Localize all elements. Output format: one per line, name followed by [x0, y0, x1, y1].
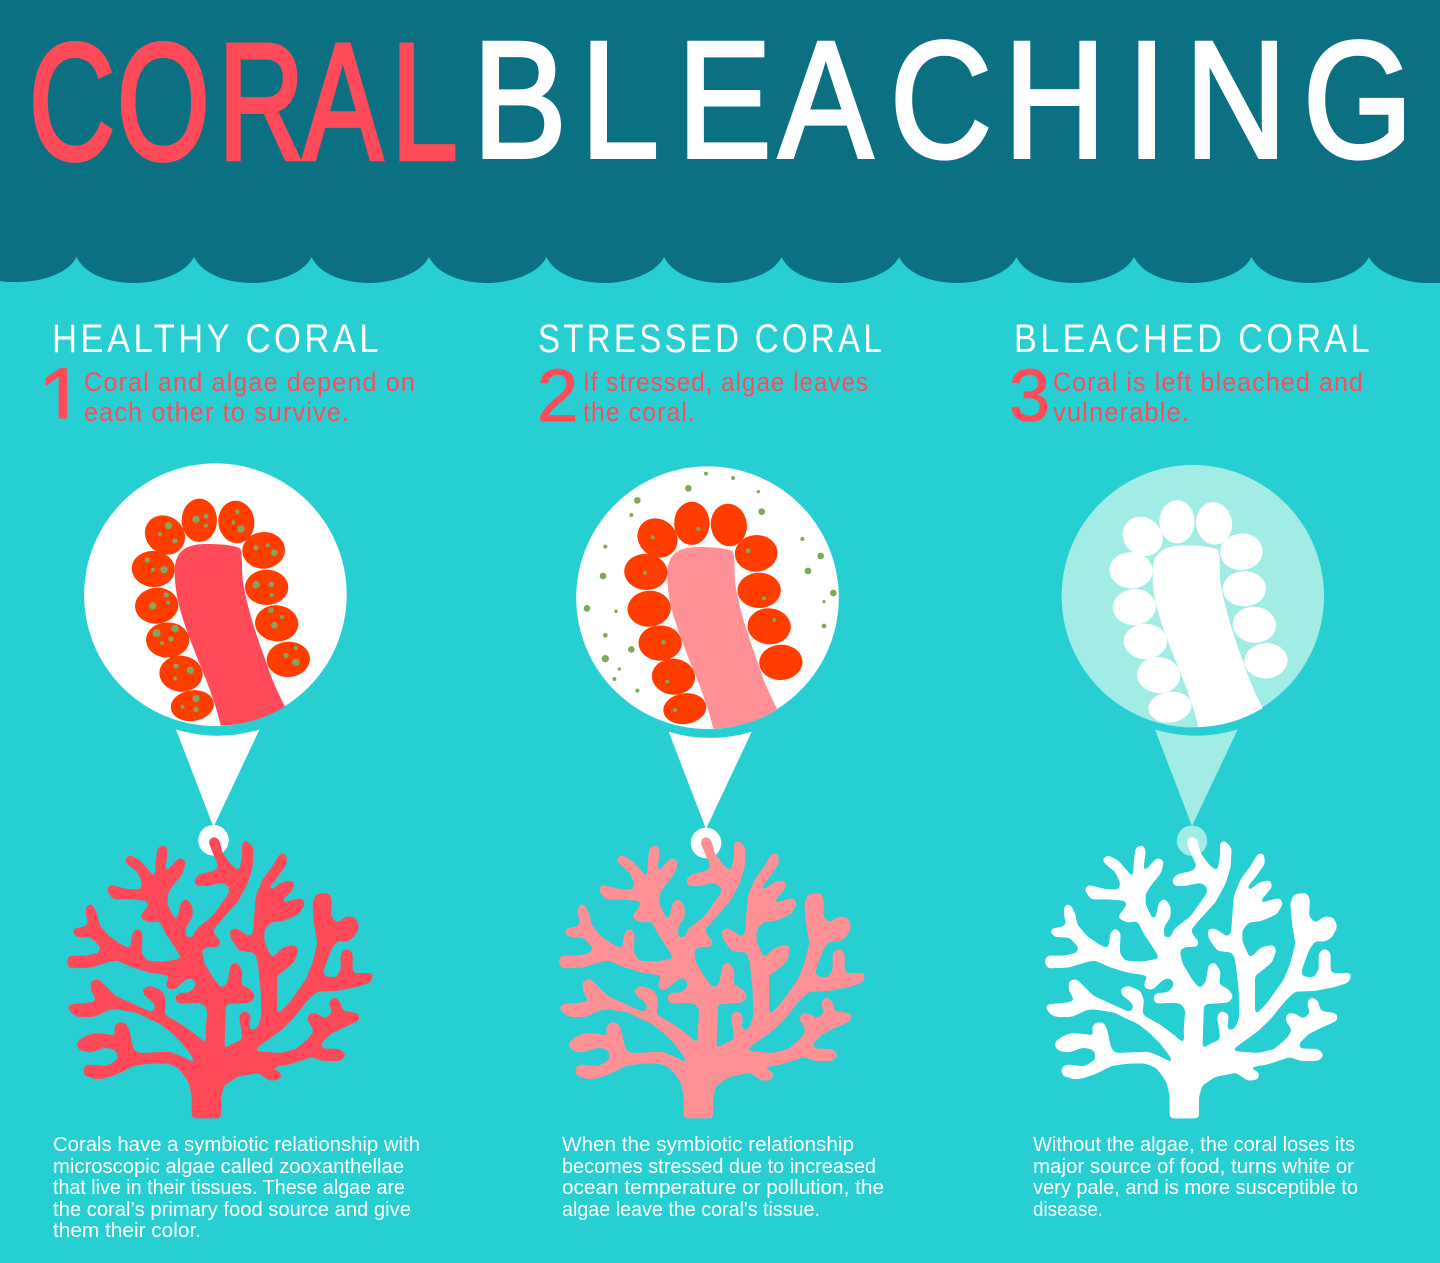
coral illustration: bleached: [1046, 837, 1351, 1117]
body text: bleached: major source of food, turns white or: [1033, 1155, 1354, 1178]
step description 2: If stressed, algae leaves: [583, 367, 869, 397]
step description 1: each other to survive.: [84, 397, 350, 427]
heading: bleached coral: BLEACHED CORAL: [1014, 317, 1373, 361]
body text: stressed: algae leave the coral's tissue.: [562, 1198, 820, 1221]
step description 3: Coral is left bleached and: [1053, 367, 1364, 397]
title word: CORAL: CORAL: [29, 9, 458, 195]
panel: healthy coral: [38, 317, 420, 1242]
body text: healthy: that live in their tissues. These algae are: [53, 1176, 405, 1199]
step description 1: Coral and algae depend on: [84, 367, 416, 397]
body text: healthy: microscopic algae called zooxanthellae: [53, 1155, 404, 1178]
polyp with algae: healthy: [130, 498, 311, 726]
title: [29, 7, 1413, 195]
coral illustration: stressed: [560, 837, 865, 1117]
pointer dot: healthy: [198, 825, 229, 856]
polyp with remaining algae: stressed: [623, 501, 803, 729]
step number 2: 2: [537, 354, 578, 437]
body text: bleached: very pale, and is more susceptible to: [1033, 1176, 1358, 1199]
magnified polyp circle: bleached: [1062, 465, 1324, 727]
body text: healthy: them their color.: [53, 1219, 201, 1242]
heading: stressed coral: STRESSED CORAL: [538, 317, 885, 361]
step number 1: 1: [38, 351, 85, 445]
step description 2: the coral.: [583, 397, 696, 427]
panel: stressed coral: [537, 317, 885, 1221]
body text: healthy: the coral’s primary food source and give: [53, 1198, 411, 1221]
header band with scalloped waves: [0, 0, 1440, 283]
body text: stressed: When the symbiotic relationship: [562, 1133, 854, 1156]
pointer dot: bleached: [1177, 826, 1207, 856]
step number 3: 3: [1009, 354, 1050, 437]
callout pointer: stressed: [669, 732, 752, 829]
body text: healthy: Corals have a symbiotic relationship with: [53, 1133, 420, 1156]
callout pointer: healthy: [176, 730, 260, 827]
magnified polyp circle: stressed: [576, 466, 839, 729]
magnified polyp circle: healthy: [84, 463, 347, 726]
pointer dot: stressed: [691, 828, 721, 858]
callout pointer: bleached: [1155, 730, 1238, 826]
panel: bleached coral: [1009, 317, 1373, 1221]
coral illustration: healthy: [68, 837, 373, 1117]
heading: healthy coral: HEALTHY CORAL: [52, 317, 382, 361]
polyp without algae: bleached: [1108, 500, 1289, 727]
body text: bleached: disease.: [1033, 1198, 1103, 1221]
body text: stressed: becomes stressed due to increased: [562, 1155, 876, 1178]
body text: stressed: ocean temperature or pollution, the: [562, 1176, 884, 1199]
body text: bleached: Without the algae, the coral loses its: [1033, 1133, 1355, 1156]
title word: BLEACHING: BLEACHING: [473, 7, 1413, 193]
step description 3: vulnerable.: [1053, 397, 1190, 427]
released algae dots: stressed: [584, 472, 837, 712]
